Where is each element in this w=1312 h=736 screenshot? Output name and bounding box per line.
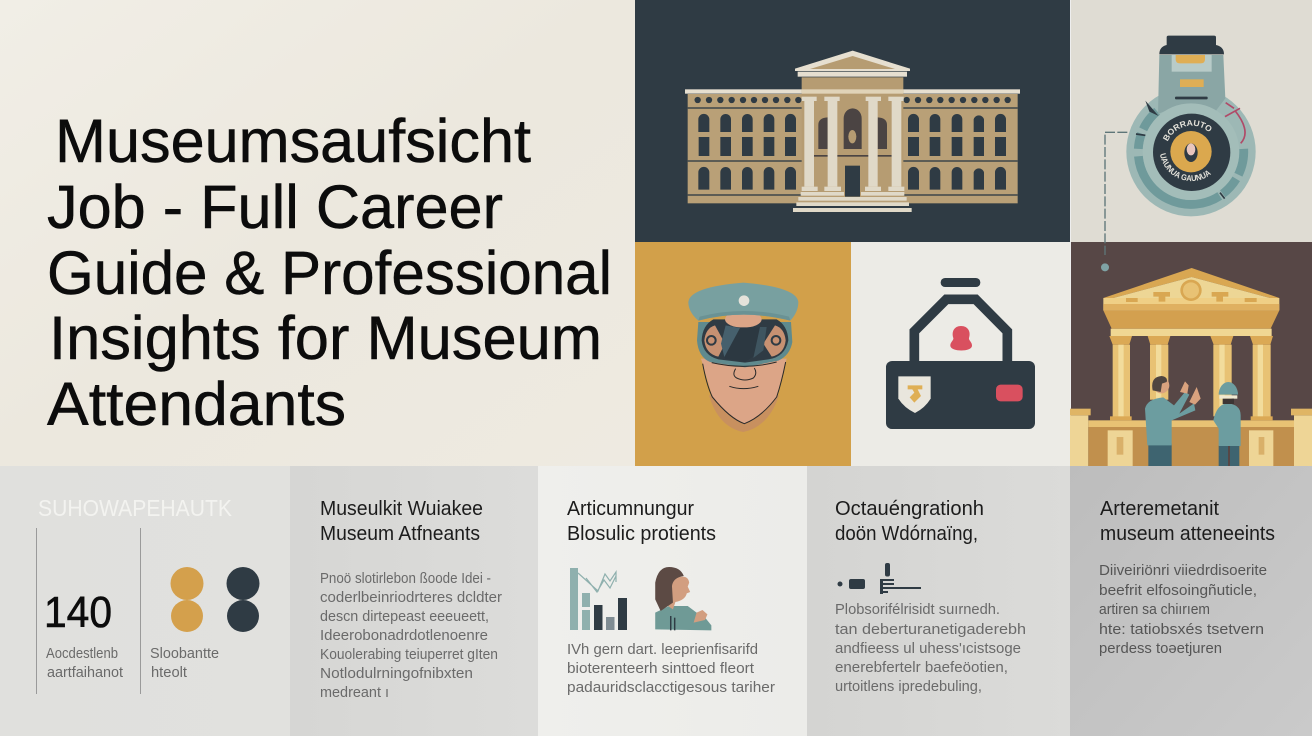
panel: guard: [635, 242, 851, 466]
text block: beefrit elfosoingñuticle,: [1099, 582, 1257, 599]
text block: urtoitlens ipredebuling,: [835, 678, 982, 695]
heading: [835, 498, 984, 545]
heading: [567, 498, 716, 545]
panel: security case: [851, 242, 1070, 466]
icon: guard face: [688, 283, 798, 432]
text block: IVh gern dart. leeprienfisarifd: [567, 641, 758, 658]
icon: person: [655, 567, 711, 630]
text block: [320, 570, 502, 701]
text block: medreant ı: [320, 684, 389, 701]
panel: museum building: [635, 0, 1070, 242]
text block: Kouolerabing teiuperret gIten: [320, 646, 498, 663]
icon: audio guide badge: [1101, 36, 1256, 272]
text block: enerebfertelr baefeöotien,: [835, 659, 1008, 676]
text block: bioterenteerh sinttoed fleort: [567, 660, 755, 677]
panel: badge background: [1071, 0, 1312, 242]
stat: 140: [44, 588, 124, 681]
stat: 140: Aocdestlenb: [46, 645, 118, 662]
panel: public projects: [538, 466, 807, 736]
heading: Blosulic protients: [567, 523, 716, 545]
heading: Arteremetanit: [1100, 498, 1219, 520]
stat: 140: aartfaihanot: [47, 664, 124, 681]
icon: security case: [886, 278, 1035, 429]
text block: coderlbeinriodrteres dcldter: [320, 589, 502, 606]
heading: stats: SUHOWAPEHAUTK: [38, 495, 233, 521]
panel: temple: [1070, 242, 1312, 466]
heading: Octauéngrationh: [835, 498, 984, 520]
icon: museum building: [685, 51, 1020, 212]
icon: bar chart: [570, 568, 627, 630]
panel: museum attendants summary: [1070, 466, 1312, 736]
text block: [567, 641, 775, 696]
text block: [835, 601, 1026, 695]
heading: Museum Atfneants: [320, 523, 480, 545]
panel: statistics: [0, 466, 290, 736]
title: Attendants: [47, 370, 346, 438]
text block: perdess toəetjuren: [1099, 640, 1222, 657]
title: Insights for Museum: [49, 304, 602, 372]
illustration: temple and visitors: [1070, 268, 1312, 466]
title: [47, 107, 612, 438]
stat label: hteolt: [151, 664, 188, 681]
title: Job - Full Career: [47, 173, 503, 241]
text block: Notlodulrningofnibxten: [320, 665, 473, 682]
icon: audio guide badge: BORRAUTO: [1162, 120, 1212, 142]
heading: museum atteneeints: [1100, 523, 1275, 545]
icon: audio guide badge: UAUNUA GAUNUA: [1160, 153, 1212, 182]
text block: andfieess ul uhess'ıcistsoge: [835, 640, 1021, 657]
text block: hte: tatiobsxés tsetvern: [1099, 621, 1264, 638]
title: Guide & Professional: [47, 239, 612, 307]
text block: Ideerobonadrdotlenoenre: [320, 627, 488, 644]
stat label: Sloobantte: [150, 645, 219, 662]
text block: [1099, 562, 1267, 657]
stat label: [150, 645, 219, 681]
text block: Pnoö slotirlebon ßoode Idei -: [320, 570, 491, 587]
text block: Plobsorifélrisidt suırnedh.: [835, 601, 1000, 618]
text block: padauridsclacctigesous tariher: [567, 679, 775, 696]
text block: Diiveiriönri viiedrdisoerite: [1099, 562, 1267, 579]
title: Museumsaufsicht: [55, 107, 531, 175]
panel: organisation: [807, 466, 1070, 736]
text block: tan deberturanetigaderebh: [835, 621, 1026, 638]
stat: 140: 140: [44, 588, 112, 637]
icon: tools: [838, 563, 921, 594]
text block: descn dirtepeast eeeueett,: [320, 608, 489, 625]
heading: [320, 498, 483, 545]
panel: museum attendants: [290, 466, 538, 736]
heading: doön Wdórnaïng,: [835, 523, 978, 545]
heading: [1100, 498, 1275, 545]
heading: Museulkit Wuiakee: [320, 498, 483, 520]
heading: Articumnungur: [567, 498, 694, 520]
panel: title: [0, 0, 635, 466]
icon: colour dots: [170, 567, 260, 632]
text block: artiren sa chiırıem: [1099, 601, 1210, 618]
